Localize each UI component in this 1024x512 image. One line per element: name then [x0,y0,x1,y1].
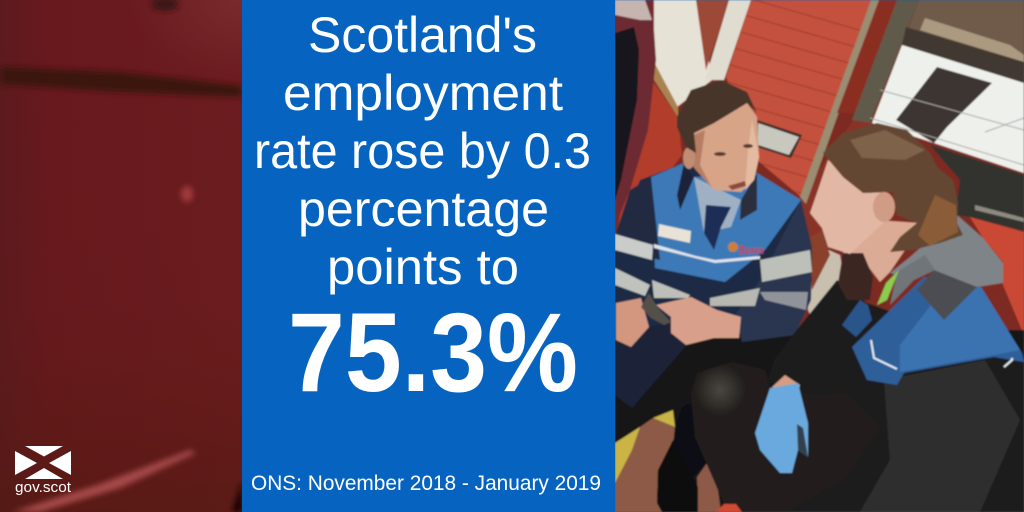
woman's neck [843,220,920,282]
pale floor behind woman [806,249,842,315]
jacket body [615,163,812,330]
name badge [658,224,691,243]
heading: employment statement: employment [283,65,563,121]
reflective stripes [615,234,653,260]
woman's coat [774,280,1014,385]
hi-vis collar [877,270,899,305]
floor [615,418,675,512]
panel: blue central panel [242,0,615,512]
shirt and tie [694,177,741,233]
shutter window [757,120,802,158]
man's lower leg [673,403,707,478]
panel: photo of mechanic and apprentice [614,0,1024,512]
woman's face [810,160,884,254]
man's face [686,103,759,192]
dark sleeves [616,177,660,260]
man's coat [615,320,690,408]
large red shutter [726,0,871,197]
posts [802,120,871,237]
red lower right wall [970,217,1024,335]
yellow floor line [615,427,640,483]
gov.scot wordmark: gov.scot [15,479,72,496]
dark lower body base [615,330,1024,512]
blue yoke of coat [852,277,1024,385]
orange tool [716,504,742,512]
blue glove [755,383,808,473]
heading: employment statement: Scotland's [308,7,537,63]
white reflective trim [871,340,897,369]
woman's ear [873,192,895,222]
grey hoodie [890,215,1003,287]
left red wall [618,80,682,228]
logo: gov.scot saltire [15,446,72,496]
source note: ONS: November 2018 - January 2019 [251,472,601,495]
woman's wrist [772,375,800,395]
boot [657,440,698,512]
collar dark [677,163,694,210]
Buses logo [728,242,738,252]
car wheel arch and tyre [614,0,656,224]
panel: blurred red background photo [0,0,242,512]
heading: employment statement: rate rose by 0.3 [254,123,591,179]
heading: employment statement: points to [327,239,519,295]
white wall [654,0,712,107]
man's hair [677,80,757,153]
woman's lower hair [838,253,873,300]
woman's hair [823,123,963,252]
dark rear machinery [930,145,1024,231]
man's hands [616,298,649,347]
part held by man [641,293,671,325]
skylight [872,45,1024,173]
key figure: 75.3%: 75.3% [288,290,578,415]
ceiling [908,0,1024,54]
heading: employment statement [254,7,591,295]
inner collar [842,300,872,337]
icon: saltire flag [15,446,71,479]
heading: employment statement: percentage [298,181,549,237]
grey flap [917,270,977,320]
woman's trousers [691,362,881,512]
panel: photo of mechanic and apprentice: Buses [739,243,764,257]
